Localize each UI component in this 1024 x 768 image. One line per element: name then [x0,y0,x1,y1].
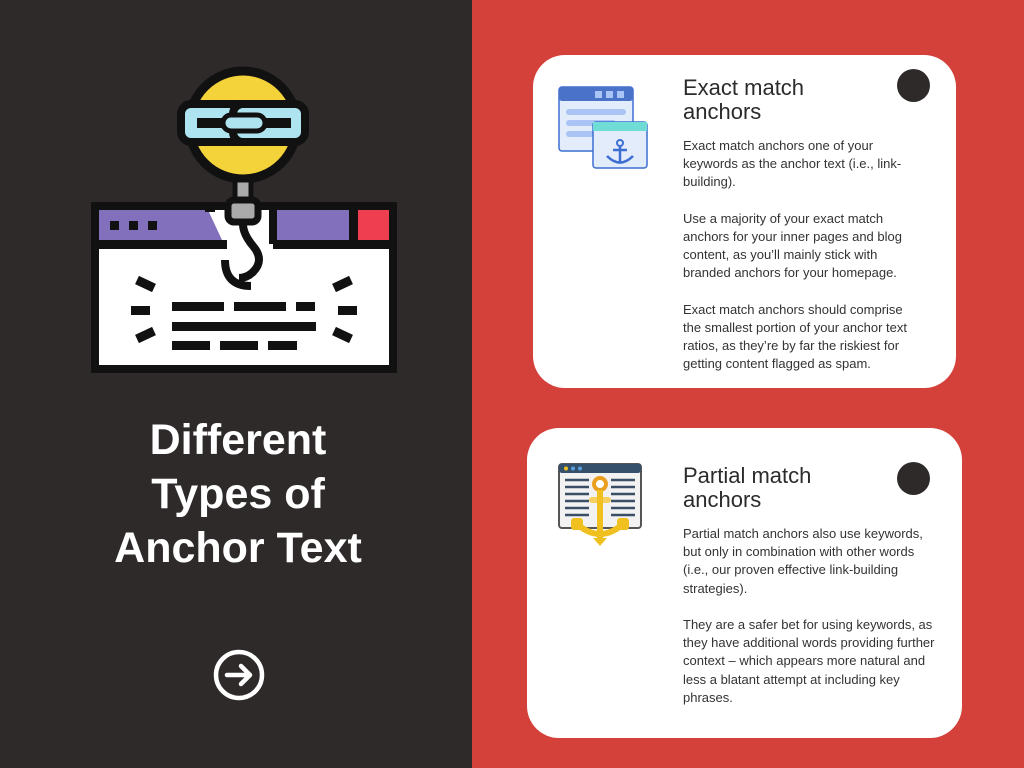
panel: partial match card [527,428,962,738]
panel: exact match card [533,55,956,388]
heading [683,463,811,512]
title: Anchor Text [114,524,362,572]
heading: anchors [683,99,761,124]
text block: Exact match anchors should comprise the smallest portion of your anchor text ratios, as they’re by far the riskiest for getting content flagged as spam. [683,302,907,371]
panel: left dark [0,0,472,768]
icon: dot [897,462,930,495]
title [114,416,362,572]
text block [683,526,934,705]
title: Different [150,416,326,464]
icon: arrow circle [214,650,264,700]
heading: Exact match [683,75,804,100]
icon: browser with anchor [558,86,648,169]
text block [683,138,907,371]
text block: Use a majority of your exact match anchors for your inner pages and blog content, as you’ll mainly stick with branded anchors for your homepage. [683,211,902,280]
icon: dot [897,69,930,102]
icon: document with anchor [558,463,642,546]
icon: browser with hook and link [91,66,397,373]
heading: Partial match [683,463,811,488]
text block: Exact match anchors one of your keywords as the anchor text (i.e., link-building). [683,138,901,189]
heading: anchors [683,487,761,512]
panel: right red [472,0,1024,768]
title: Types of [151,470,325,518]
heading [683,75,804,124]
text block: Partial match anchors also use keywords, but only in combination with other words (i.e., our proven effective link-building strategies). [683,526,923,596]
text block: They are a safer bet for using keywords, as they have additional words providing further context – which appears more natural and less a blatant attempt at including key phrases. [683,617,934,705]
